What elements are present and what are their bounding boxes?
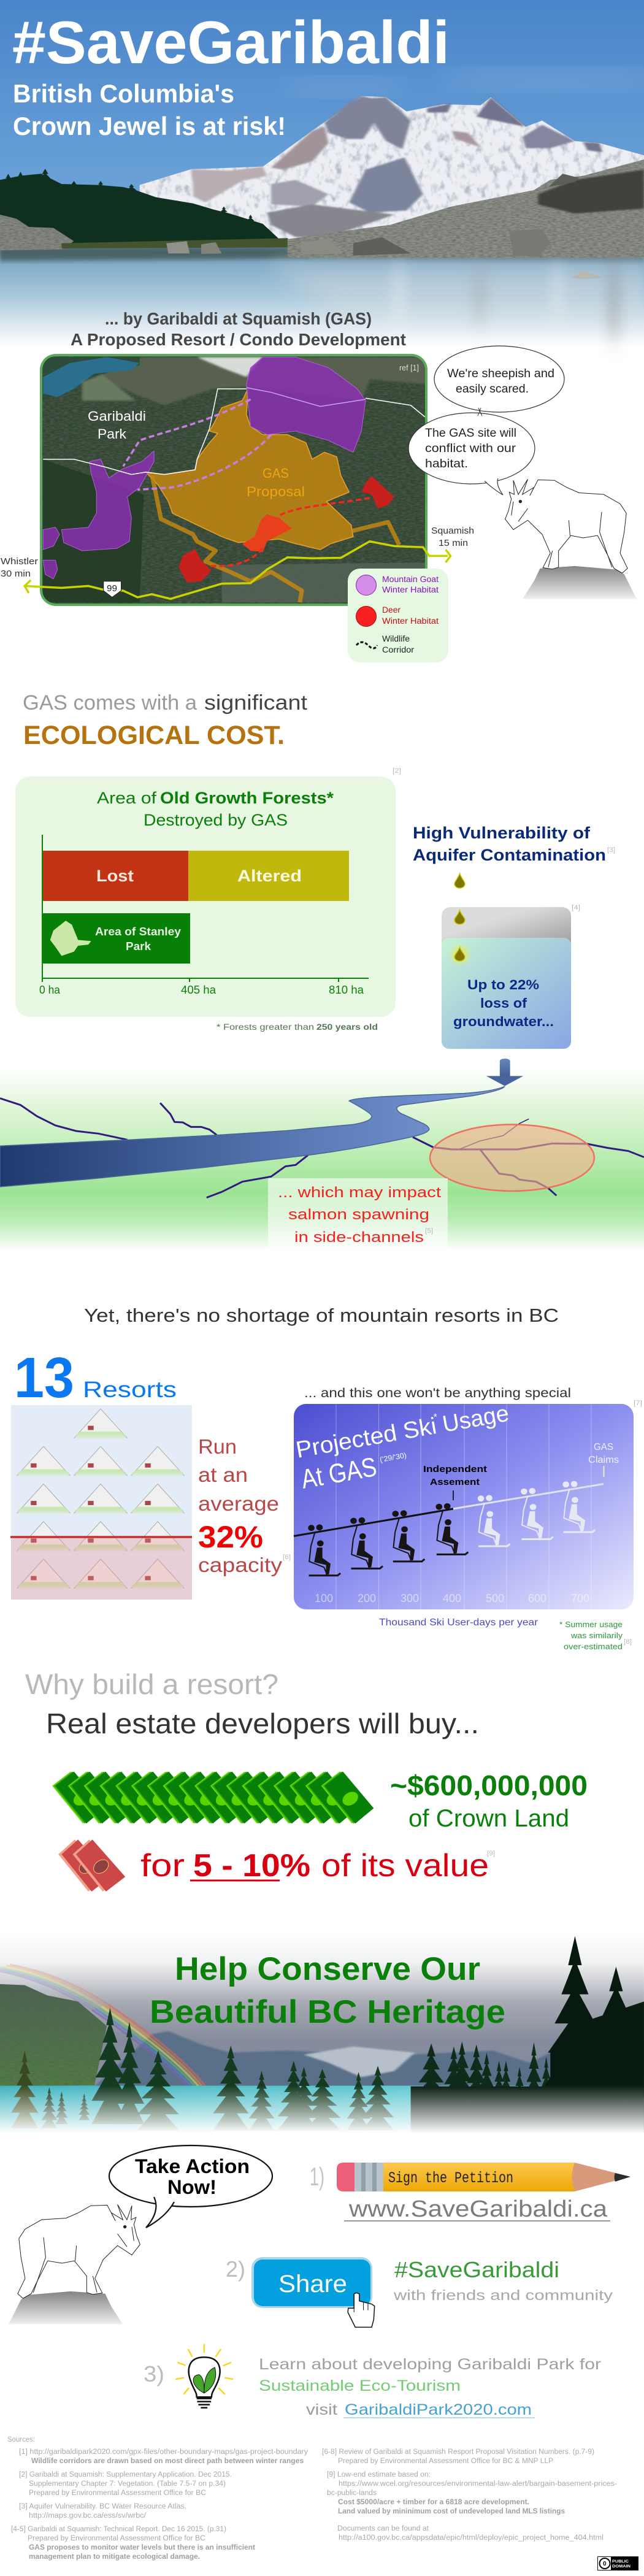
sources: right column: bc-public-lands	[327, 2490, 377, 2497]
footnote: forests: * Forests greater than	[217, 1022, 314, 1032]
label: independent assessment: Assement	[430, 1477, 480, 1487]
axis values	[315, 1592, 589, 1604]
step 1: number: 1)	[310, 2162, 324, 2191]
sources: left column: Sources:	[7, 2436, 35, 2444]
heading: proposed development: A Proposed Resort / Condo Development	[71, 330, 406, 349]
callout: salmon spawning: salmon spawning	[288, 1206, 429, 1223]
legend: Winter Habitat	[382, 616, 439, 626]
sources: left column	[7, 2436, 308, 2561]
map labels: ref [1]	[399, 363, 419, 372]
panel: resort mountains	[10, 1405, 192, 1600]
axis values: 500	[486, 1592, 504, 1604]
label: gas claims: Claims	[588, 1455, 619, 1465]
callout: salmon spawning: ... which may impact	[278, 1184, 441, 1201]
sources: right column: Prepared by Environmental Assessment Office for BC & MNP LLP	[338, 2458, 553, 2465]
panel: satellite map	[37, 354, 431, 607]
axis labels	[39, 984, 364, 996]
heading: aquifer contamination	[413, 824, 615, 864]
badge: public domain: DOMAIN	[612, 2564, 631, 2569]
stat: 13 resorts: Resorts	[83, 1377, 177, 1402]
rainbow	[0, 1965, 211, 2093]
diagram: river and side channels	[0, 1087, 644, 1198]
bar: altered: Altered	[237, 867, 302, 885]
mountain goat habitat	[43, 357, 366, 579]
panel: groundwater	[442, 873, 580, 1049]
chart title: Area of	[97, 789, 157, 807]
callout: salmon spawning	[268, 1178, 448, 1249]
label: gas claims	[588, 1442, 619, 1477]
chart title: Old Growth Forests*	[160, 789, 334, 807]
stat: 32% capacity: [6]	[283, 1554, 291, 1561]
trees	[11, 2007, 394, 2130]
callout: salmon spawning: in side-channels	[294, 1229, 424, 1246]
label: squamish: 15 min	[439, 538, 468, 548]
panel: projected ski usage chart: [7]	[634, 1400, 642, 1407]
legend: Wildlife	[382, 634, 410, 643]
icon: stack of green bills	[52, 1771, 374, 1823]
axis values: 200	[358, 1592, 376, 1604]
chart title: Projected Ski	[294, 1413, 439, 1463]
heading: ecological cost: significant	[204, 691, 308, 715]
legend: Winter Habitat	[382, 585, 439, 594]
label: whistler: 30 min	[1, 569, 31, 579]
sources: right column: https://www.wcel.org/resources/environmental-law-alert/bargain-basement-prices-	[339, 2480, 617, 2488]
speech bubble: sheepish	[434, 346, 564, 412]
heading: why build a resort: Why build a resort?	[25, 1668, 278, 1700]
axis values: 100	[315, 1592, 333, 1604]
speech bubble: sheepish: We're sheepish and	[447, 367, 554, 380]
label: squamish	[431, 526, 474, 548]
stat: 5-10% of value	[140, 1848, 495, 1884]
stat: 13 resorts: 13	[14, 1346, 74, 1409]
sources: left column: GAS proposes to monitor water levels but there is an insufficient	[29, 2544, 255, 2551]
sources: right column: Land valued by mininimum cost of undeveloped land MLS listings	[338, 2508, 565, 2515]
chart title: Usage	[440, 1401, 511, 1438]
label: squamish: Squamish	[431, 526, 474, 536]
stat: 32% capacity: average	[198, 1492, 279, 1515]
map labels: Park	[98, 426, 127, 442]
label: gas claims: GAS	[594, 1442, 613, 1452]
heading: ecological cost: ECOLOGICAL COST.	[23, 721, 285, 750]
bar: lost: Lost	[96, 867, 134, 885]
legend: Mountain Goat	[382, 575, 439, 584]
chart title: *	[433, 1412, 439, 1423]
heading: help conserve: Beautiful BC Heritage	[150, 1994, 505, 2030]
map labels: Proposal	[247, 484, 305, 499]
step 2: hashtag	[393, 2257, 613, 2303]
chart title: Destroyed by GAS	[144, 811, 288, 829]
mountain	[140, 96, 644, 245]
icon: light bulb with leaf	[175, 2344, 233, 2408]
sources: left column: Prepared by Environmental Assessment Office for BC	[29, 2490, 206, 2497]
heading: real estate developers: Real estate developers will buy...	[46, 1708, 479, 1739]
chairlift line	[294, 1484, 604, 1536]
label: independent assessment: Independent	[423, 1464, 487, 1474]
icon: red bills	[58, 1839, 125, 1892]
subtitle: British Columbia's	[13, 79, 234, 108]
stat: 32% capacity: Run	[198, 1435, 237, 1458]
legend: Corridor	[382, 645, 415, 654]
sources: left column: management plan to mitigate ecological damage.	[29, 2553, 200, 2561]
speech bubble: sheepish: easily scared.	[456, 383, 529, 396]
sources: right column: http://a100.gov.bc.ca/appsdata/epic/html/deploy/epic_project_home_404.html	[339, 2534, 604, 2542]
legend: Deer	[382, 605, 401, 615]
step 1: pencil petition	[337, 2163, 631, 2191]
stat: 32% capacity: 32%	[198, 1520, 263, 1554]
step 3: learn text	[259, 2356, 601, 2418]
speech bubble: take action: Take Action	[135, 2155, 250, 2177]
chart title	[294, 1401, 511, 1495]
forest	[0, 169, 288, 247]
step 2: hashtag: with friends and community	[393, 2287, 613, 2303]
step 3: learn text: visit	[306, 2401, 337, 2418]
step 2: hashtag: #SaveGaribaldi	[394, 2257, 559, 2282]
sources: left column: Supplementary Chapter 7: Vegetation. (Table 7.5-7 on p.34)	[29, 2480, 226, 2488]
stat: 5-10% of value: for	[140, 1848, 185, 1884]
sources: left column: [3] Aquifer Vulnerability. BC Water Resource Atlas.	[19, 2503, 186, 2510]
step 2: share button	[251, 2257, 375, 2327]
sources: right column: [9] Low-end estimate based on:	[327, 2471, 431, 2478]
speech bubble: conflict: The GAS site will	[425, 427, 516, 440]
subtitle: Crown Jewel is at risk!	[13, 112, 286, 140]
footnote: summer usage: [8]	[624, 1638, 632, 1646]
footnote: forests	[217, 1022, 378, 1032]
stat: crown land value: of Crown Land	[408, 1805, 569, 1832]
stat: 5-10% of value: [9]	[487, 1850, 495, 1857]
wildlife corridors	[123, 399, 370, 566]
step 3: number: 3)	[144, 2361, 164, 2386]
sources: right column: Documents can be found at	[337, 2525, 429, 2532]
badge: public domain	[597, 2556, 638, 2570]
chart title: At GAS	[299, 1452, 379, 1495]
panel: groundwater: [4]	[572, 904, 580, 911]
photo: lake with rainbow and trees	[0, 1932, 644, 2133]
gas proposal area	[146, 388, 399, 602]
axis labels: 405 ha	[181, 984, 217, 996]
heading: proposed development: ... by Garibaldi at Squamish (GAS)	[105, 309, 372, 328]
stat: 13 resorts	[14, 1346, 177, 1409]
badge: public domain: PUBLIC	[612, 2559, 629, 2564]
footnote: summer usage	[559, 1620, 632, 1651]
axis values: 700	[571, 1592, 589, 1604]
map labels	[88, 363, 419, 499]
speech bubble: conflict: habitat.	[425, 458, 468, 470]
subtitle	[13, 79, 286, 140]
speech bubble: conflict: conflict with our	[425, 442, 516, 455]
axis caption: Thousand Ski User-days per year	[379, 1617, 539, 1628]
illustration: goat on rock, facing right	[9, 2204, 140, 2324]
chart title: ('29/'30)	[379, 1451, 407, 1464]
heading: aquifer contamination: [3]	[607, 846, 615, 854]
map labels: Garibaldi	[88, 408, 146, 424]
title: #SaveGaribaldi	[12, 9, 450, 76]
axis values: 400	[443, 1592, 461, 1604]
icon: hand cursor	[348, 2293, 375, 2327]
chairlift icons	[308, 1481, 595, 1576]
highway 99 road	[25, 542, 451, 599]
heading: nothing special: ... and this one won't be anything special	[304, 1386, 571, 1400]
stat: crown land value: ~$600,000,000	[390, 1769, 588, 1801]
panel: old growth forests chart: [2]	[393, 767, 401, 775]
footnote: summer usage: over-estimated	[564, 1642, 623, 1651]
chart axes	[42, 835, 369, 982]
bar: stanley park	[42, 913, 190, 964]
heading: no shortage of resorts: Yet, there's no shortage of mountain resorts in BC	[84, 1305, 559, 1326]
capacity line	[10, 1536, 192, 1538]
stat: 32% capacity: at an	[198, 1463, 248, 1486]
bar: altered	[188, 851, 349, 901]
panel: old growth forests chart	[15, 767, 401, 1017]
spawning area	[430, 1124, 594, 1191]
axis labels: 810 ha	[329, 984, 364, 996]
sources: right column	[322, 2448, 617, 2542]
stat: 32% capacity: capacity	[198, 1554, 283, 1576]
bar: lost	[42, 851, 188, 901]
bar: stanley park: Park	[126, 940, 151, 953]
label: whistler: Whistler	[1, 556, 38, 567]
groundwater text: groundwater...	[453, 1014, 554, 1029]
heading: ecological cost	[23, 691, 308, 750]
speech bubble: take action	[109, 2145, 272, 2228]
axis values: 300	[401, 1592, 419, 1604]
sources: left column: [1] http://garibaldipark2020.com/gpx-files/other-boundary-maps/gas-project-boundary	[19, 2448, 308, 2456]
sources: left column: [4-5] Garibaldi at Squamish: Technical Report. Dec 16 2015. (p.31)	[11, 2526, 226, 2533]
step 2: share button: Share	[278, 2271, 347, 2298]
step 3: learn text: GaribaldiPark2020.com	[345, 2401, 532, 2418]
heading: help conserve: Help Conserve Our	[175, 1951, 480, 1987]
label: whistler	[1, 556, 38, 579]
sources: left column: http://maps.gov.bc.ca/ess/sv/wrbc/	[29, 2512, 147, 2520]
groundwater text: loss of	[480, 995, 527, 1011]
sources: right column: Cost $5000/acre + timber for a 6818 acre development.	[338, 2499, 529, 2506]
legend	[348, 569, 448, 662]
hero photo: mountain and lake	[0, 0, 644, 347]
footnote: summer usage: was similarily	[570, 1631, 623, 1640]
sources: right column: [6-8] Review of Garibaldi at Squamish Resport Proposal Visitation Numbers. (p.7-9)	[322, 2448, 594, 2456]
step 3: learn text: Sustainable Eco-Tourism	[259, 2377, 461, 2394]
step 1: website: www.SaveGaribaldi.ca	[348, 2196, 608, 2222]
chart title	[97, 789, 334, 829]
heading: ecological cost: GAS comes with a	[23, 691, 197, 715]
footnote: summer usage: * Summer usage	[559, 1620, 623, 1629]
sources: left column: [2] Garibaldi at Squamish: Supplementary Application. Dec 2015.	[19, 2471, 232, 2478]
icon: contaminant drops	[454, 873, 465, 961]
step 3: learn text: Learn about developing Garibaldi Park for	[259, 2356, 601, 2373]
rocks	[0, 159, 644, 279]
highway 99 road: 99	[107, 583, 117, 594]
arrow: groundwater to river	[486, 1059, 523, 1086]
panel: projected ski usage chart	[294, 1400, 642, 1609]
axis labels: 0 ha	[39, 984, 61, 996]
speech bubble: conflict	[408, 408, 535, 495]
heading: aquifer contamination: High Vulnerability of	[413, 824, 591, 842]
heading: aquifer contamination: Aquifer Contamination	[413, 846, 606, 864]
footnote: forests: 250 years old	[316, 1022, 378, 1032]
deer habitat	[178, 476, 394, 583]
step 2: number: 2)	[226, 2256, 245, 2282]
illustration: mountain goat on rock	[505, 479, 637, 599]
callout: salmon spawning: [5]	[425, 1227, 433, 1235]
sources: left column: Prepared by Environmental Assessment Office for BC	[28, 2535, 205, 2542]
axis values: 600	[528, 1592, 546, 1604]
speech bubble: take action: Now!	[167, 2176, 217, 2198]
badge: public domain: 0	[603, 2561, 607, 2567]
river section background	[0, 1067, 644, 1251]
heading: proposed development	[71, 309, 406, 349]
stat: 5-10% of value: 5 - 10%	[193, 1848, 310, 1884]
stat: 32% capacity	[198, 1435, 291, 1576]
groundwater text	[453, 977, 554, 1029]
map labels: GAS	[263, 466, 289, 481]
step 1: pencil petition: Sign the Petition	[388, 2169, 513, 2187]
stat: crown land value	[390, 1769, 588, 1832]
heading: help conserve	[150, 1951, 505, 2030]
stat: 5-10% of value: of its value	[321, 1848, 489, 1884]
bar: stanley park: Area of Stanley	[95, 926, 181, 938]
label: independent assessment	[423, 1464, 487, 1500]
sources: left column: Wildlife corridors are drawn based on most direct path between winter ranges	[31, 2458, 304, 2465]
groundwater text: Up to 22%	[467, 977, 539, 992]
